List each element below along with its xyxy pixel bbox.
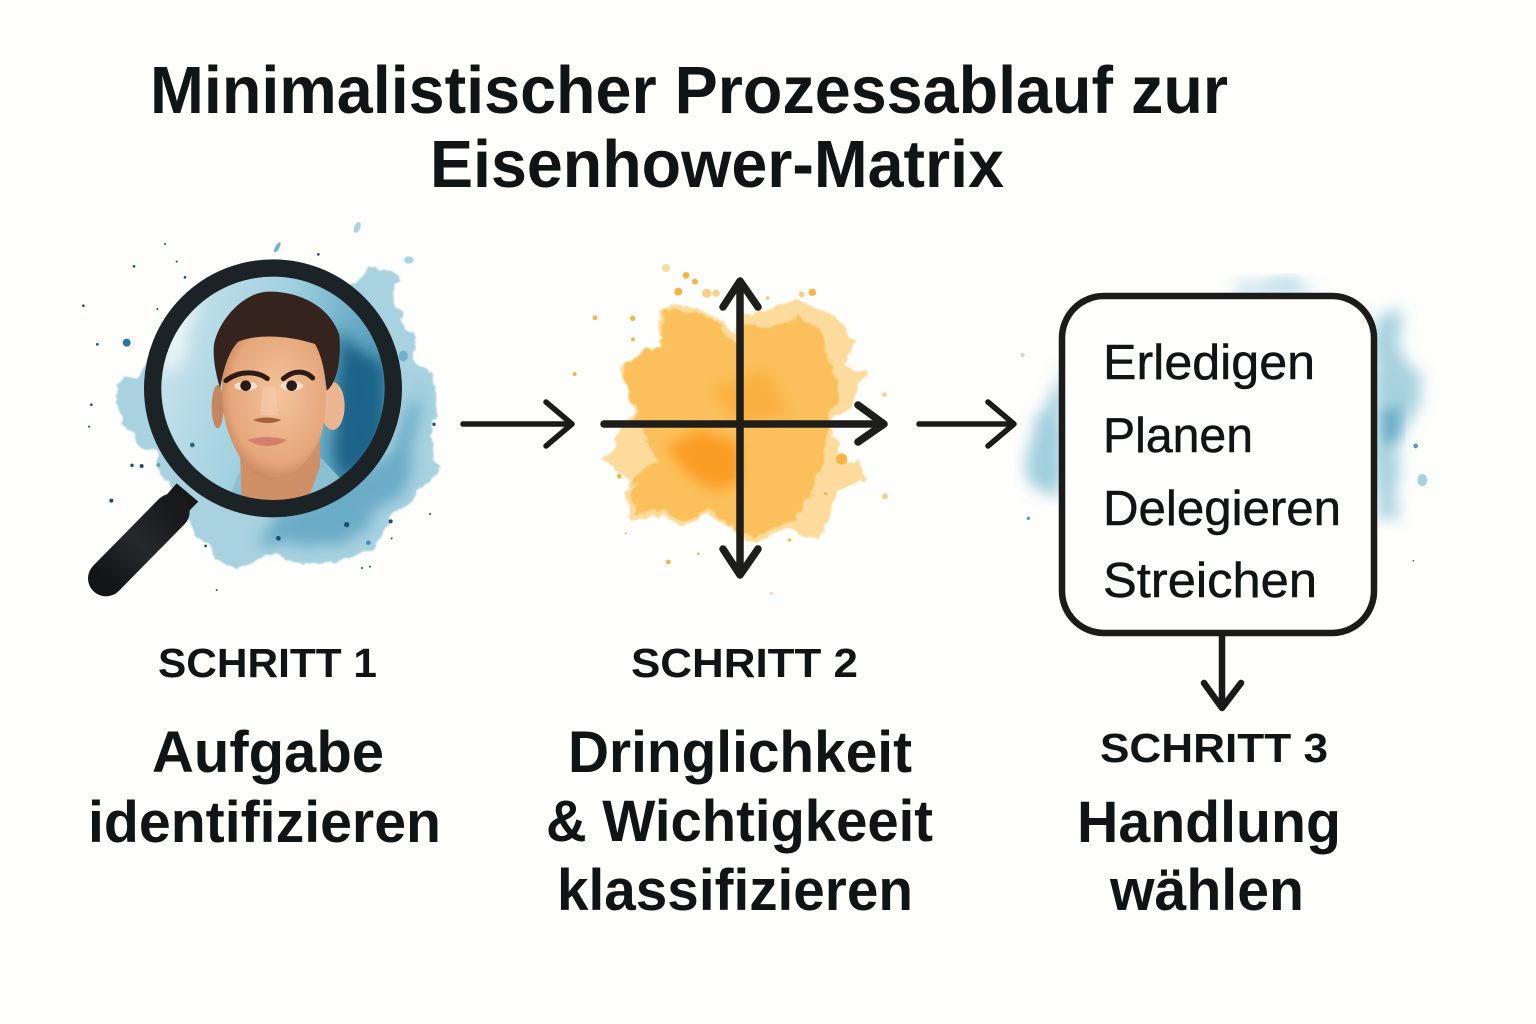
step 3 description xyxy=(1077,790,1341,923)
step 3 description: Handlung xyxy=(1077,790,1341,855)
step 2 description: Dringlichkeit xyxy=(568,720,912,785)
lips xyxy=(247,437,287,446)
face xyxy=(222,334,326,479)
panel: step 1 magnifier illustration xyxy=(82,221,440,591)
arrow: step 2 to step 3 xyxy=(919,402,1014,446)
rounded box xyxy=(1062,296,1374,633)
nose xyxy=(253,417,282,423)
step 1 description: identifizieren xyxy=(88,790,441,855)
action list: Erledigen xyxy=(1103,336,1315,390)
orange watercolor splash xyxy=(573,264,888,594)
step 1 description xyxy=(88,720,441,855)
step 2 description: & Wichtigkeeit xyxy=(546,789,933,854)
title xyxy=(150,53,1228,202)
eyebrows xyxy=(226,372,313,381)
arrow: box to step 3 label xyxy=(1204,636,1241,708)
action list: Streichen xyxy=(1103,554,1317,608)
blue watercolor behind box xyxy=(1021,278,1427,561)
magnifier ring xyxy=(153,268,393,509)
step 1 description: Aufgabe xyxy=(152,720,384,785)
hair xyxy=(214,292,340,391)
action list xyxy=(1103,336,1341,608)
title: Eisenhower-Matrix xyxy=(430,127,1004,202)
step 2 description: klassifizieren xyxy=(557,858,913,923)
action list: Planen xyxy=(1103,409,1253,463)
matrix axes with arrowheads xyxy=(604,281,884,575)
ears xyxy=(212,385,224,428)
arrow: step 1 to step 2 xyxy=(463,402,572,446)
blue watercolor splash xyxy=(82,221,440,591)
step 2 description xyxy=(546,720,933,923)
title: Minimalistischer Prozessablauf zur xyxy=(150,53,1228,128)
lens with portrait xyxy=(160,275,387,507)
step 1 label: SCHRITT 1 xyxy=(158,640,377,686)
step 2 label: SCHRITT 2 xyxy=(631,640,858,686)
eyes xyxy=(234,380,303,391)
panel: step 2 matrix illustration xyxy=(573,264,888,594)
panel: step 3 action box xyxy=(1021,278,1427,633)
step 3 label: SCHRITT 3 xyxy=(1100,725,1328,771)
magnifier handle xyxy=(106,483,198,578)
step 3 description: wählen xyxy=(1109,858,1304,923)
neck xyxy=(240,440,320,503)
action list: Delegieren xyxy=(1103,482,1341,536)
shirt xyxy=(232,458,340,495)
